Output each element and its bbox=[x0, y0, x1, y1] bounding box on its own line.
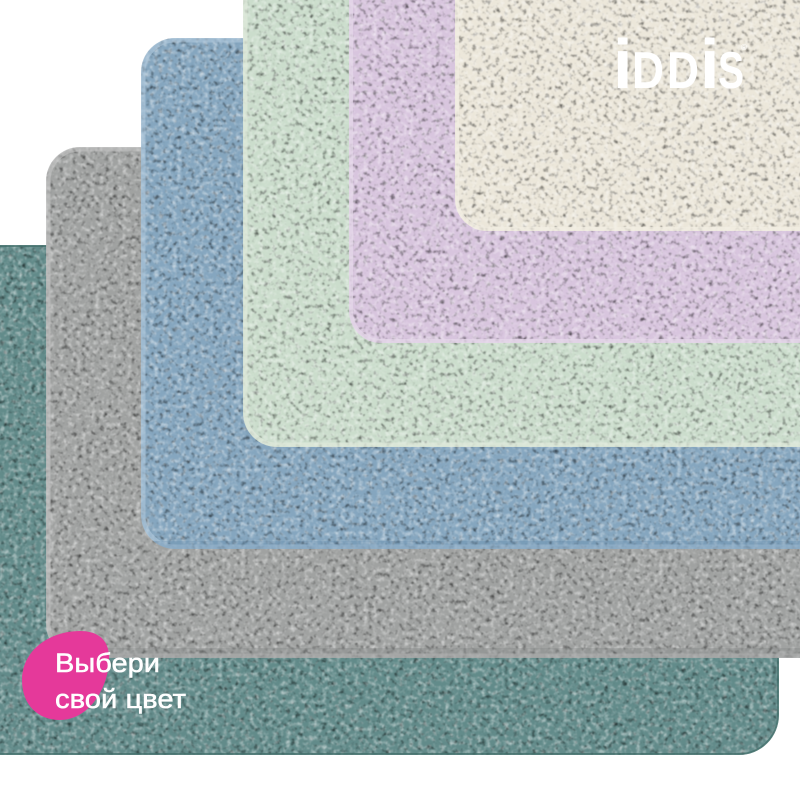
caption: choose your colour bbox=[55, 648, 186, 714]
badge: pink blob bbox=[22, 631, 109, 720]
logo: IDDIS: S bbox=[718, 42, 744, 100]
caption: choose your colour: Выбери bbox=[55, 648, 160, 678]
rug: gray bbox=[46, 147, 800, 658]
rug: lilac bbox=[349, 0, 800, 343]
logo: IDDIS: i bbox=[613, 25, 632, 103]
logo: IDDIS: i bbox=[700, 25, 719, 103]
rug: cream bbox=[455, 0, 800, 231]
logo: IDDIS: ® bbox=[741, 43, 747, 52]
logo: IDDIS bbox=[613, 25, 747, 103]
logo: IDDIS: D bbox=[632, 42, 664, 100]
logo: IDDIS: D bbox=[667, 42, 699, 100]
rug: blue bbox=[141, 38, 800, 549]
rug: mint green bbox=[243, 0, 800, 447]
rug: teal bbox=[0, 245, 779, 755]
caption: choose your colour: свой цвет bbox=[55, 684, 186, 714]
